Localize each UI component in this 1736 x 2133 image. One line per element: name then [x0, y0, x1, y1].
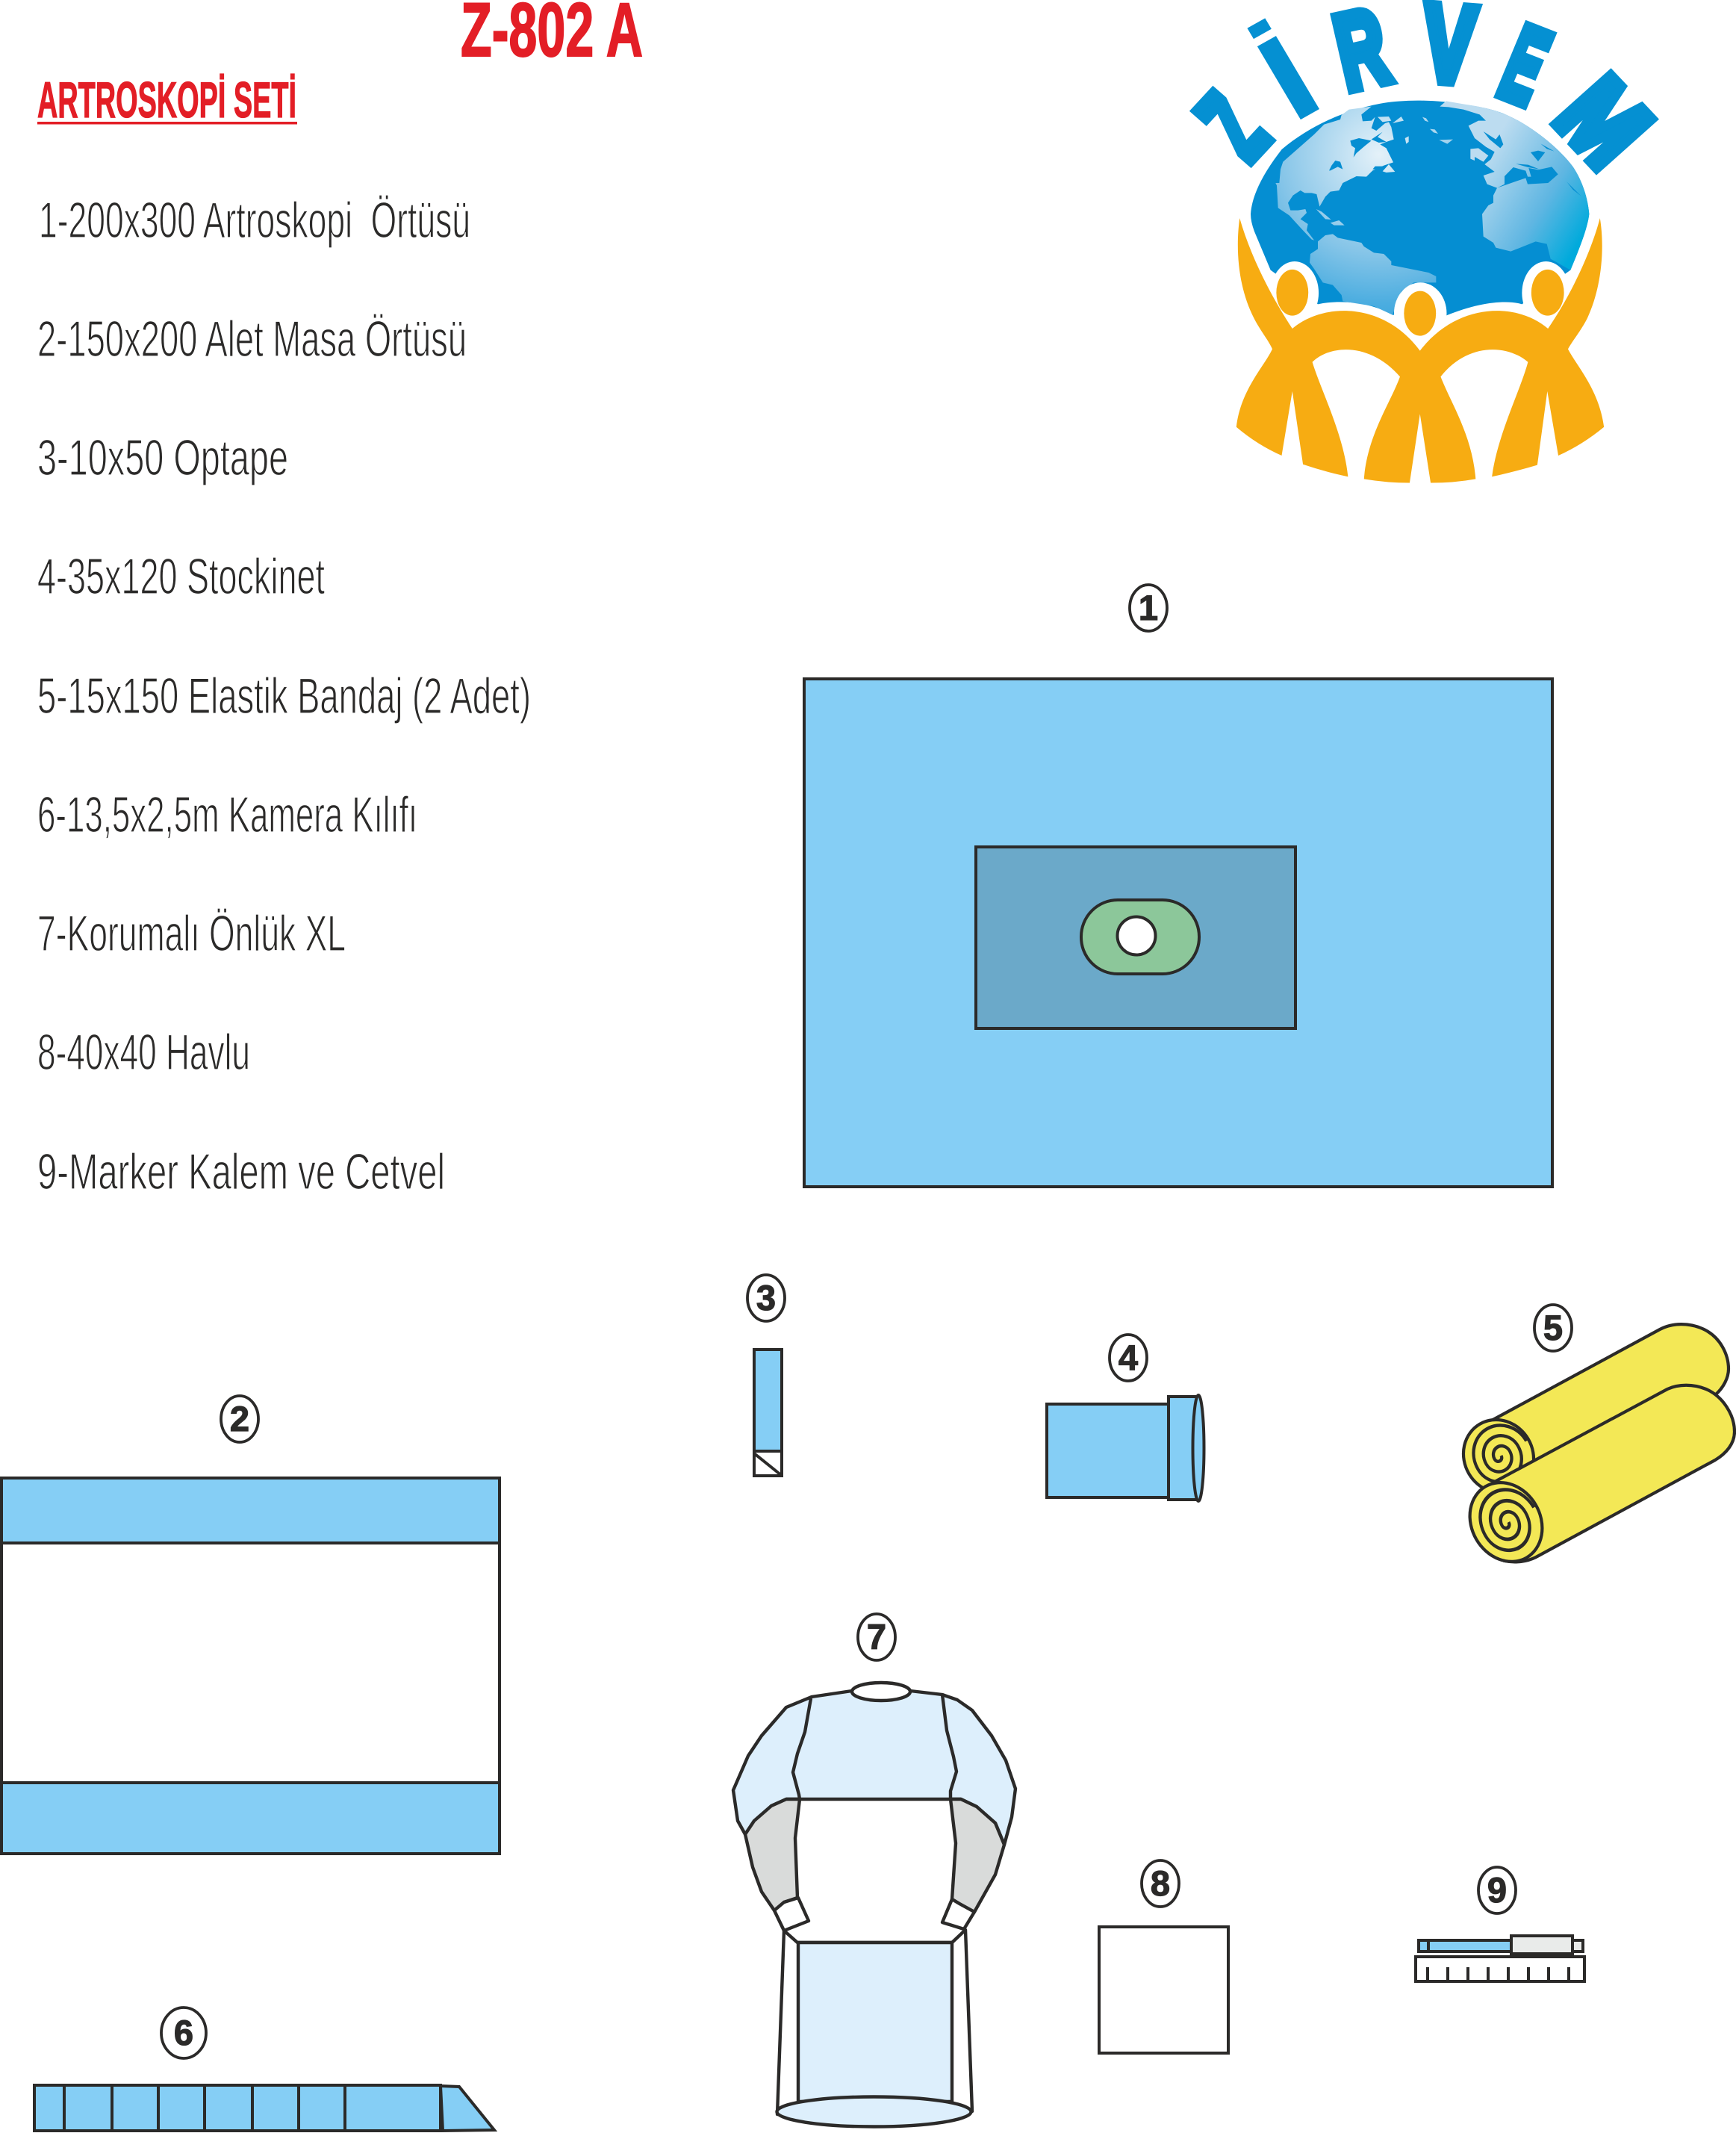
icon: towel	[1099, 1927, 1228, 2053]
number badge 5: 5	[1543, 1308, 1563, 1347]
europe and africa	[1440, 101, 1589, 270]
text block: contents list: 4-35x120 Stockinet	[37, 548, 325, 605]
number badge 2	[221, 1396, 258, 1442]
number badge 6: 6	[174, 2013, 193, 2052]
gown lower panel	[777, 1930, 972, 2114]
number badge 9: 9	[1487, 1870, 1507, 1910]
logo wordmark	[1176, 0, 1673, 188]
heading: set name with underline	[37, 72, 297, 128]
text block: contents list: 1-200x300 Artroskopi Örtüsü	[39, 192, 470, 249]
number badge 3: 3	[756, 1278, 776, 1317]
number badge 3	[747, 1275, 785, 1321]
icon: elastic bandage rolls	[1450, 1324, 1735, 1575]
text block: contents list: 7-Korumalı Önlük XL	[37, 905, 346, 962]
gown hem	[777, 2097, 971, 2127]
text block: contents list	[37, 192, 531, 1200]
icon: surgical gown	[733, 1683, 1015, 2127]
number badge 7	[858, 1614, 895, 1660]
heading: set name with underline: ARTROSKOPİ SETİ	[37, 72, 296, 128]
logo people	[1236, 218, 1604, 483]
text block: contents list: 3-10x50 Optape	[37, 429, 288, 486]
islands west	[1316, 117, 1453, 226]
number badge 4	[1110, 1335, 1147, 1381]
number badge 8	[1142, 1860, 1179, 1907]
number badge 6	[161, 2008, 206, 2058]
panel: instrument table cover	[1, 1478, 500, 1854]
logo head halos	[1271, 261, 1570, 344]
drape fenestration	[1081, 900, 1199, 974]
gown cuffs	[774, 1898, 974, 1931]
number badge 5	[1534, 1305, 1572, 1351]
drape inner panel	[976, 847, 1295, 1028]
logo wordmark: Z	[1176, 75, 1289, 179]
number badge 4: 4	[1119, 1338, 1138, 1377]
hudson bay and great lakes	[1329, 132, 1387, 170]
north america	[1275, 107, 1394, 241]
icon: marker pen and ruler	[1416, 1936, 1584, 1981]
logo wordmark: İ	[1235, 8, 1342, 147]
text block: contents list: 5-15x150 Elastik Bandaj (2 Adet)	[37, 668, 531, 724]
icon: optape	[754, 1350, 782, 1476]
gown seams	[793, 1695, 956, 1799]
gown right sleeve	[951, 1799, 1004, 1912]
number badge 8: 8	[1151, 1863, 1170, 1903]
number badge 1: 1	[1139, 588, 1158, 627]
text block: contents list: 9-Marker Kalem ve Cetvel	[37, 1143, 445, 1200]
logo: Zirvem globe and people	[1176, 0, 1673, 483]
number badge 2: 2	[230, 1399, 249, 1438]
gown upper	[733, 1691, 1015, 1845]
panel: artroscopy drape	[804, 679, 1552, 1187]
text block: contents list: 8-40x40 Havlu	[37, 1024, 250, 1081]
number badge 1	[1130, 585, 1167, 631]
icon: camera sleeve	[34, 2085, 494, 2131]
number badge 7: 7	[867, 1617, 886, 1657]
number badge 9	[1478, 1867, 1516, 1913]
gown left sleeve	[745, 1799, 800, 1910]
front roll	[1456, 1385, 1735, 1575]
text block: contents list: 6-13,5x2,5m Kamera Kılıfı	[37, 786, 417, 843]
logo globe	[1251, 101, 1589, 316]
logo wordmark: E	[1486, 4, 1564, 126]
icon: stockinet	[1047, 1395, 1204, 1501]
back roll	[1450, 1324, 1729, 1506]
logo wordmark: M	[1534, 55, 1673, 188]
gown neck	[852, 1683, 910, 1701]
text block: contents list: 2-150x200 Alet Masa Örtüsü	[37, 311, 467, 367]
south america	[1310, 234, 1436, 315]
